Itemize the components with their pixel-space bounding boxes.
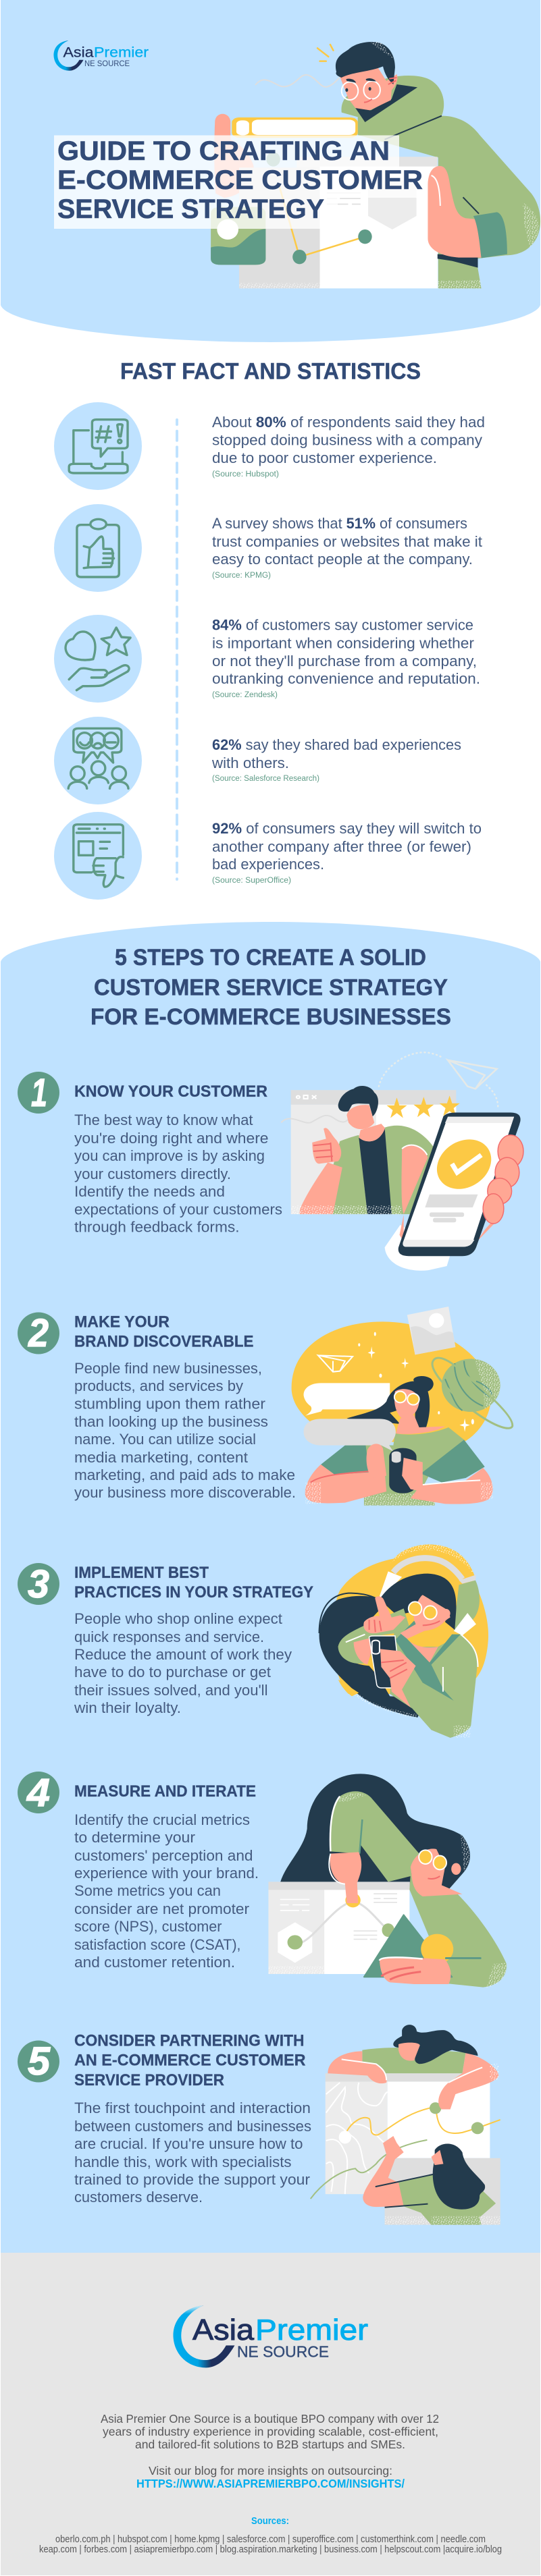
heading: fast fact and statistics: FAST FACT AND STATISTICS [120, 359, 421, 385]
picture card [407, 1307, 455, 1354]
arms [305, 1464, 386, 1503]
face [340, 67, 397, 110]
step 3 body: quick responses and service. [74, 1628, 264, 1645]
step 5 body: handle this, work with specialists [74, 2154, 292, 2170]
step 5 heading: CONSIDER PARTNERING WITH [74, 2031, 304, 2050]
yellow route [346, 2107, 500, 2135]
step 3 body [74, 1610, 292, 1716]
stat 1: due to poor customer experience. [212, 449, 437, 466]
left hand [214, 114, 254, 198]
stat 5: 92% of consumers say they will switch to [212, 820, 482, 837]
logo: header: NE SOURCE [84, 60, 130, 68]
step 2 body: products, and services by [74, 1377, 243, 1394]
bottom woman [398, 2174, 496, 2225]
forearm [330, 1852, 361, 1903]
line chart [302, 1901, 388, 1942]
step 2 body: name. You can utilize social [74, 1431, 256, 1448]
panel: footer background [1, 2253, 540, 2575]
stat 5 [212, 820, 482, 885]
stars [386, 1095, 460, 1118]
long hair [279, 1774, 470, 1890]
illustration: two women on a map [311, 2025, 500, 2225]
panel: five steps background [1, 922, 540, 2253]
company description: years of industry experience in providing scalable, cost-efficient, [103, 2425, 438, 2438]
icon: speech faces and people [54, 717, 142, 804]
triangle and ball [364, 1915, 452, 1977]
map panels [326, 2081, 388, 2194]
company description: and tailored-fit solutions to B2B startups and SMEs. [135, 2438, 405, 2451]
green hoodie [341, 76, 540, 288]
chart board [268, 1890, 325, 1974]
step 5 body: customers deserve. [74, 2189, 203, 2205]
yellow backdrop [292, 1321, 491, 1442]
icon: clipboard with thumbs up [54, 504, 142, 592]
step 1 body: expectations of your customers [74, 1201, 282, 1217]
step 1 badge [18, 1071, 59, 1115]
logo: header: Premier [94, 45, 149, 61]
step 5 heading: SERVICE PROVIDER [74, 2071, 224, 2089]
step 4 body: Some metrics you can [74, 1882, 221, 1899]
hair [336, 42, 395, 84]
bookmark shape [368, 180, 417, 229]
logo: footer [173, 2305, 368, 2367]
contour lines [326, 2083, 388, 2194]
step 4 heading: MEASURE AND ITERATE [74, 1782, 256, 1801]
stat 1: stopped doing business with a company [212, 432, 482, 448]
stat 1: (Source: Hubspot) [212, 470, 279, 478]
right hand [428, 166, 482, 258]
stat 3 [212, 617, 480, 699]
step 5 body: between customers and businesses [74, 2118, 311, 2135]
sparkles [358, 1332, 474, 1432]
step 3 body: Reduce the amount of work they [74, 1646, 292, 1663]
step 3 heading: IMPLEMENT BEST [74, 1564, 209, 1582]
browser window [291, 1105, 456, 1214]
body [409, 1874, 507, 1988]
logo: header [53, 40, 149, 71]
thumb [312, 1128, 341, 1163]
step 4 body: to determine your [74, 1829, 195, 1846]
logo: footer: NE SOURCE [237, 2343, 329, 2361]
sources [39, 2516, 502, 2555]
body [390, 1620, 478, 1738]
stat 4 [211, 736, 461, 783]
image tile [211, 207, 265, 265]
step 5 body: are crucial. If you're unsure how to [74, 2135, 303, 2152]
hair [346, 1376, 434, 1427]
step 4 badge [18, 1771, 59, 1815]
step 1 heading: KNOW YOUR CUSTOMER [74, 1083, 267, 1101]
wavy line [255, 75, 342, 87]
step 3 heading: PRACTICES IN YOUR STRATEGY [74, 1583, 313, 1601]
stat 4: 62% say they shared bad experiences [212, 736, 461, 753]
step 4 body: customers' perception and [74, 1847, 253, 1864]
hand on triangle [380, 1957, 450, 1984]
stat 2: easy to contact people at the company. [212, 551, 473, 568]
stat 4: (Source: Salesforce Research) [212, 775, 319, 783]
pointing hand [363, 1596, 405, 1633]
dark fold [438, 254, 478, 268]
step 5 heading: AN E-COMMERCE CUSTOMER [74, 2052, 306, 2069]
person [324, 1135, 367, 1214]
step 2 body: People find new businesses, [74, 1360, 262, 1377]
step 4 body: satisfaction score (CSAT), [74, 1936, 240, 1953]
step 5 body: The first touchpoint and interaction [74, 2100, 311, 2116]
check badge [428, 1134, 500, 1195]
stat 3: 84% of customers say customer service [212, 617, 473, 633]
step 3 badge: 3 [28, 1562, 49, 1606]
step 3 heading [74, 1564, 313, 1601]
stat 3: is important when considering whether [212, 634, 474, 652]
step 2 body [74, 1360, 296, 1501]
stat 3: (Source: Zendesk) [212, 691, 278, 699]
face [401, 1595, 450, 1639]
step 2 heading: MAKE YOUR [74, 1313, 170, 1331]
paper plane [448, 1060, 497, 1089]
blog link [136, 2464, 405, 2490]
logo: footer: Premier [255, 2313, 368, 2347]
stat 2: (Source: KPMG) [212, 572, 271, 580]
stat 3: outranking convenience and reputation. [212, 670, 480, 687]
cuff [473, 212, 507, 258]
title highlight [54, 135, 427, 229]
sleeve [338, 1608, 411, 1664]
title: SERVICE STRATEGY [57, 194, 324, 224]
step 2 body: stumbling upon them rather [74, 1396, 265, 1412]
yellow backdrop [333, 1557, 488, 1694]
stat 2: A survey shows that 51% of consumers [212, 515, 467, 532]
phone [398, 1113, 521, 1256]
face [411, 1848, 463, 1896]
heading: five steps: 5 STEPS TO CREATE A SOLID [115, 945, 426, 970]
top woman [362, 2048, 466, 2073]
hood [393, 1558, 463, 1579]
chat bubbles [304, 1383, 390, 1416]
stat 4: with others. [211, 755, 289, 771]
planet [442, 1359, 500, 1412]
hood neck [355, 84, 417, 122]
step 3 body: People who shop online expect [74, 1610, 282, 1627]
step 1 body: Identify the needs and [74, 1183, 225, 1200]
step 5 body [74, 2100, 311, 2205]
stat 3: or not they'll purchase from a company, [212, 653, 477, 669]
holding hand [380, 1649, 416, 1707]
step 3 body: win their loyalty. [74, 1699, 181, 1716]
yellow book [232, 117, 358, 138]
step 2 body: marketing, and paid ads to make [74, 1467, 295, 1483]
illustration: man holding documents [211, 41, 540, 288]
stat 5: bad experiences. [212, 856, 324, 873]
step 3 body: their issues solved, and you'll [74, 1682, 267, 1699]
step 2 badge: 2 [28, 1311, 49, 1355]
step 5 badge: 5 [28, 2039, 51, 2083]
heading: five steps [91, 945, 451, 1030]
illustration: customer with phone and stars [281, 1052, 523, 1271]
grey bubble [304, 1419, 396, 1452]
step 1 body: you can improve is by asking [74, 1147, 265, 1164]
dashed divider [176, 420, 178, 879]
title [57, 136, 423, 224]
step 1 body: The best way to know what [74, 1112, 253, 1128]
illustration: woman with phone and planet [292, 1307, 513, 1506]
step 4 body [74, 1811, 259, 1971]
green route [311, 2140, 427, 2199]
blog link: Visit our blog for more insights on outsourcing: [149, 2464, 392, 2477]
step 1 body: your customers directly. [74, 1166, 231, 1182]
fingers [367, 1444, 386, 1478]
hair [380, 1574, 457, 1630]
step 5 body: trained to provide the support your [74, 2171, 310, 2188]
step 4 body: score (NPS), customer [74, 1918, 222, 1935]
dotted flight path [379, 1052, 498, 1109]
sleeve [330, 1791, 419, 1882]
blog link: HTTPS://WWW.ASIAPREMIERBPO.COM/INSIGHTS/ [136, 2477, 405, 2490]
step 1 body [74, 1112, 282, 1235]
stat 1: About 80% of respondents said they had [212, 414, 485, 431]
step 4 badge: 4 [26, 1771, 50, 1815]
step 2 body: media marketing, content [74, 1449, 248, 1466]
step 5 badge [18, 2039, 59, 2083]
illustration: woman pointing with phone [319, 1544, 488, 1738]
torso [352, 1427, 464, 1504]
stat 2: trust companies or websites that make it [212, 533, 482, 550]
phone [389, 1448, 417, 1493]
heading: five steps: CUSTOMER SERVICE STRATEGY [94, 975, 448, 1000]
stat 2 [212, 515, 482, 580]
logo: footer: Asia [192, 2313, 255, 2347]
icon: browser with thumbs down [54, 812, 142, 900]
step 5 heading [74, 2031, 306, 2089]
title: GUIDE TO CRAFTING AN [57, 136, 390, 166]
stat 5: another company after three (or fewer) [212, 838, 471, 855]
step 1 body: through feedback forms. [74, 1219, 239, 1235]
panel: header background [1, 0, 540, 342]
step 3 body: have to do to purchase or get [74, 1664, 271, 1680]
step 2 badge [18, 1311, 59, 1355]
sources: Sources: [251, 2516, 289, 2527]
glasses [342, 81, 380, 100]
icon: heart, star and hand [54, 615, 142, 703]
stat 5: (Source: SuperOffice) [212, 877, 291, 885]
step 2 heading: BRAND DISCOVERABLE [74, 1332, 254, 1351]
sources: oberlo.com.ph | hubspot.com | home.kpmg | salesforce.com | superoffice.com | customerthink.com | needle.com [55, 2534, 486, 2545]
step 4 body: Identify the crucial metrics [74, 1811, 250, 1828]
hand and sleeve [385, 1225, 450, 1271]
hexagon node [278, 1922, 312, 1963]
title: E-COMMERCE CUSTOMER [57, 165, 423, 195]
connected nodes [280, 187, 365, 257]
step 2 heading [74, 1313, 254, 1351]
heading: five steps: FOR E-COMMERCE BUSINESSES [91, 1004, 451, 1030]
step 4 body: experience with your brand. [74, 1865, 259, 1882]
step 2 body: your business more discoverable. [74, 1484, 296, 1501]
step 4 body: and customer retention. [74, 1954, 235, 1971]
yellow sparks [317, 45, 333, 61]
illustration: woman marking a chart [268, 1774, 507, 1988]
step 2 body: than looking up the business [74, 1413, 268, 1430]
logo: header: Asia [63, 45, 94, 61]
step 3 badge [18, 1562, 59, 1606]
fingers [483, 1135, 523, 1224]
step 1 body: you're doing right and where [74, 1130, 269, 1147]
document panels [297, 157, 438, 168]
company description [101, 2412, 439, 2451]
paper plane [318, 1355, 353, 1372]
icon: laptop with alert chat [54, 402, 142, 490]
phone [369, 1636, 401, 1688]
step 1 badge: 1 [31, 1071, 47, 1115]
stat 1 [212, 414, 485, 478]
step 4 body: consider are net promoter [74, 1900, 249, 1917]
company description: Asia Premier One Source is a boutique BPO company with over 12 [101, 2412, 439, 2426]
